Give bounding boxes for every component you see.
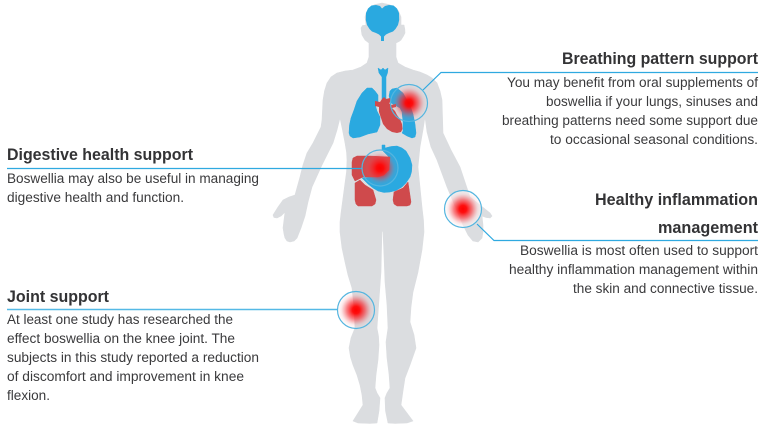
icon: liver and intestines — [352, 156, 411, 206]
callout: healthy inflammation management — [477, 191, 758, 296]
body text: breathing patterns need some support due — [502, 113, 758, 128]
heading — [595, 191, 758, 237]
connector line — [7, 168, 362, 170]
body text: to occasional seasonal conditions. — [550, 132, 758, 147]
human body silhouette — [273, 3, 492, 424]
marker: lungs — [390, 84, 428, 122]
body text: the skin and connective tissue. — [573, 281, 758, 296]
body text — [509, 243, 758, 296]
body text: flexion. — [7, 388, 50, 403]
heading: Healthy inflammation — [595, 191, 758, 209]
heading: management — [658, 219, 758, 237]
marker: knee — [338, 292, 374, 328]
body text: Boswellia may also be useful in managing — [7, 171, 259, 186]
heading: Joint support — [7, 288, 109, 306]
connector line — [7, 308, 338, 310]
icon: brain — [366, 5, 399, 41]
icon: heart — [375, 97, 402, 133]
body text: boswellia if your lungs, sinuses and — [546, 94, 758, 109]
body text: effect boswellia on the knee joint. The — [7, 331, 235, 346]
body text: You may benefit from oral supplements of — [507, 75, 758, 90]
marker: digestive — [362, 150, 398, 186]
icon: lungs and trachea — [349, 68, 416, 138]
body text: healthy inflammation management within — [509, 262, 758, 277]
heading: Digestive health support — [7, 146, 193, 164]
body text — [7, 171, 259, 205]
marker: wrist — [444, 190, 482, 228]
connector line — [423, 72, 758, 90]
icon: stomach — [362, 145, 412, 192]
body text: At least one study has researched the — [7, 312, 233, 327]
callout: joint support — [7, 288, 338, 403]
body text — [502, 75, 758, 147]
connector line — [477, 224, 758, 240]
heading: Breathing pattern support — [562, 50, 758, 68]
body text: of discomfort and improvement in knee — [7, 369, 244, 384]
body text — [7, 312, 259, 403]
body text: subjects in this study reported a reduction — [7, 350, 259, 365]
callout: digestive health support — [7, 146, 362, 205]
body text: digestive health and function. — [7, 190, 184, 205]
body text: Boswellia is most often used to support — [520, 243, 758, 258]
callout: breathing pattern support — [423, 50, 758, 147]
